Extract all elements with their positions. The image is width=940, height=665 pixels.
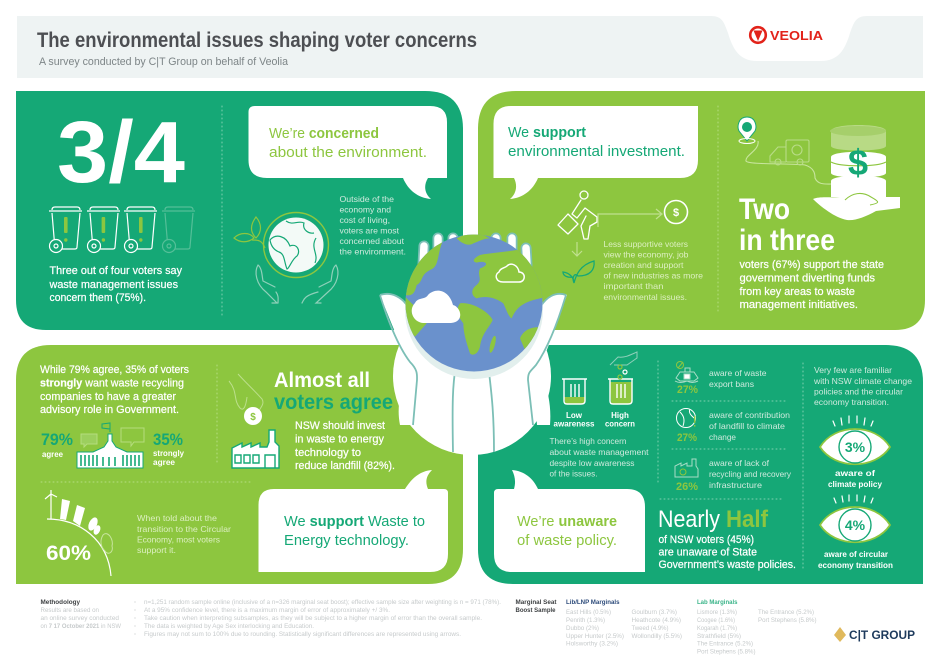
text: very few are familiar: economy transition. [814,397,889,407]
icon: city on curved planet with 60%: 60% [46,542,91,565]
text: outside of the economy [340,194,406,256]
panel: environmental investment [478,91,925,330]
speech bubble: we support environmental investment [494,106,698,199]
label: aware of circular economy transition [818,549,893,570]
text: of NSW voters: are unaware of State [658,546,757,558]
text: very few are familiar: policies and the circular [814,386,903,396]
heading: two in three: Two [739,193,790,226]
text: three out of four: Three out of four voters say [50,265,182,277]
footer: marginal seat boost sample [516,599,816,656]
footer: methodology: an online survey conducted [40,615,119,622]
footer: marginal seat boost sample: Goulburn (3.7%) [632,609,677,616]
subtitle: A survey conducted by C|T Group on behalf of Veolia [39,56,289,68]
text: less supportive voters: environmental issues. [604,292,687,302]
speech bubble: we support waste to energy: We support Waste to [284,513,425,530]
icon: eye 4% circular economy [820,495,890,542]
icon: sprout [563,261,594,283]
footer: survey notes: The data is weighted by Age Sex interlocking and Education. [144,623,314,630]
text: outside of the economy: cost of living, [340,215,390,225]
panel: concerned about the environment [16,91,463,330]
Veolia logo: VEOLIA [770,28,824,43]
Veolia logo [750,27,824,43]
footer: survey notes [134,599,501,638]
arrow: down to sprout [572,242,582,256]
labels: low awareness, high concern: High [611,411,629,420]
icon: hand dropping coin: $ [250,412,256,423]
heading: almost all voters agree [274,369,393,414]
footer: marginal seat boost sample: Lismore (1.3%) [697,609,737,616]
text: while 79% agree: While 79% agree, 35% of voters [40,364,189,376]
footer: marginal seat boost sample: Heathcote (4.9%) [632,617,681,624]
text: three out of four: waste management issues [49,279,178,291]
footer: marginal seat boost sample: Lib/LNP Marginals [566,599,620,606]
text: less supportive voters: creation and support [604,260,684,270]
label: aware of climate policy: aware of [835,468,875,478]
text: NSW should invest: NSW should invest [295,420,385,432]
text: outside of the economy: economy and [340,204,391,214]
stat: 35% strongly agree: strongly [153,449,185,458]
heading: almost all voters agree: Almost all [274,369,370,392]
icon: ship with waste export ban [675,362,698,382]
text: voters support: government diverting funds [740,272,876,284]
footer: marginal seat boost sample: Port Stephens (5.8%) [697,648,756,656]
text: export bans: aware of waste [709,368,767,378]
footer: marginal seat boost sample: Kogarah (1.7%) [697,625,737,632]
text: infrastructure: recycling and recovery [709,469,792,479]
footer: marginal seat boost sample: Holsworthy (3.2%) [566,640,618,648]
heading: nearly half: Nearly [658,506,720,533]
text: while 79% agree: companies to have a greater [40,391,176,403]
heading: nearly half: Half [726,506,769,533]
text: there's high concern: despite low awareness [550,458,634,468]
globe [406,234,542,372]
text: when told about circular economy: transition to the Circular [137,524,231,534]
footer: marginal seat boost sample: Dubbo (2%) [566,625,599,632]
text: of NSW voters: Government’s waste policies. [658,559,796,571]
icon: stack of coins [830,125,886,197]
icon: earth in hands with leaves [234,212,338,303]
icon: hand dropping coin [229,374,263,425]
text: infrastructure: aware of lack of [709,458,770,468]
text: when told about circular economy [137,513,231,555]
text: while 79% agree: strongly want waste recycling [40,378,184,390]
stat: 79% agree: agree [42,450,64,459]
speech bubble: we support waste to energy [258,470,448,572]
speech bubble: we support environmental investment: environmental investment. [508,143,685,160]
stat: 35% strongly agree [153,430,185,467]
speech bubble: we're unaware: of waste policy. [517,532,617,549]
footer: marginal seat boost sample: The Entrance (5.2%) [758,609,814,616]
text: less supportive voters [604,239,703,302]
text: outside of the economy: concerned about [340,236,405,246]
icon: globe with exclamation [676,408,696,428]
icon: dollar coin [664,200,688,224]
footer: marginal seat boost sample: Marginal Seat [516,599,557,606]
icon: waste truck [770,140,809,165]
text: landfill contribution: change [709,432,736,442]
footer: marginal seat boost sample: Strathfield (5%) [697,633,741,640]
icon: four waste bins [49,207,195,252]
icon: dollar coin: $ [673,207,679,219]
speech bubble: we're concerned: We’re concerned [269,125,379,142]
text: outside of the economy: the environment. [340,246,406,256]
speech bubble: we're unaware [494,470,645,572]
icon: white cloud [412,291,460,323]
text: when told about circular economy: support it. [137,545,176,555]
text: NSW should invest: in waste to energy [295,434,384,446]
stat: 27% export bans: 27% [677,384,698,396]
icon: high concern bin with hand [608,352,637,404]
text: very few are familiar [813,365,912,407]
text: infrastructure: infrastructure [709,480,762,490]
icon: eye 3% climate policy [820,416,890,464]
text: there's high concern: of the issues. [550,468,598,478]
footer: methodology [40,599,122,630]
icon: stack of coins: $ [848,142,868,183]
stat: 26% infrastructure: 26% [676,481,698,493]
speech bubble: we're concerned [248,106,447,199]
text: less supportive voters: Less supportive voters [604,239,688,249]
label: aware of climate policy [828,468,882,489]
text: NSW should invest [295,420,395,472]
central illustration: hands holding globe [380,230,567,455]
heading: two in three [739,193,835,257]
labels: low awareness, high concern [554,411,635,428]
speech bubble: we support waste to energy: Energy technology. [284,532,409,549]
stat: 79% agree [41,430,73,459]
panel: waste to energy [16,345,463,584]
text: infrastructure [709,458,792,490]
labels: low awareness, high concern: awareness [554,420,595,428]
stat: 79% agree: 79% [41,430,73,449]
panel: unaware of waste policy [478,345,923,584]
text: three out of four [49,265,182,304]
text: landfill contribution [709,410,790,442]
text: three out of four: concern them (75%). [50,292,146,304]
icon: location pin with recycling and route [738,117,832,184]
text: very few are familiar: Very few are familiar [814,365,892,375]
text: outside of the economy: voters are most [340,226,400,236]
footer: marginal seat boost sample: Upper Hunter (2.5%) [566,633,624,640]
footer: marginal seat boost sample: Penrith (1.3%) [566,617,605,624]
stat: 27% landfill: 27% [677,432,697,444]
icon: eye 4% circular economy: 4% [845,517,866,533]
footer: marginal seat boost sample: Lab Marginals [697,599,738,606]
footer: survey notes: Take caution when interpreting subsamples, as they will be subject to a higher margin of error than the overall sample. [144,615,482,622]
footer: methodology: Methodology [40,599,80,606]
icon: recycling factory [675,459,698,477]
labels: low awareness, high concern: Low [566,411,583,420]
icon: open hand under coins [813,191,900,220]
text: voters support [740,259,884,311]
text: voters support: from key areas to waste [740,286,855,298]
big stat 3/4: 3/4 [57,104,185,201]
footer: survey notes: At a 95% confidence level, there is a maximum margin of error of approximately +/ 3%. [144,607,390,614]
footer: marginal seat boost sample: Tweed (4.9%) [632,625,668,632]
footer: survey notes: Figures may not sum to 100% due to rounding. Statistically significant differences are represented using arrows. [144,631,461,638]
label: aware of climate policy: climate policy [828,479,882,489]
arrow: to dollar coin [598,209,662,227]
text: when told about circular economy: Economy, most voters [137,534,220,544]
speech bubble: we're unaware: We’re unaware [517,513,617,530]
speech bubble: we support environmental investment: We support [508,124,586,141]
footer: methodology: Results are based on [40,607,99,614]
footer: marginal seat boost sample: East Hills (0.5%) [566,609,611,616]
header band [17,16,923,78]
heading: nearly half [658,506,769,533]
text: while 79% agree [40,364,189,416]
footer: marginal seat boost sample: Coogee (1.6%) [697,617,735,624]
speech bubble: we're concerned: about the environment. [269,144,427,161]
text: landfill contribution: of landfill to climate [709,421,785,431]
text: voters support: management initiatives. [740,299,858,311]
icon: outlined cloud [496,264,524,282]
icon: person walking with briefcase [558,191,597,239]
footer: methodology: on 7 17 October 2021 in NSW [40,623,122,630]
text: very few are familiar: with NSW climate change [813,376,912,386]
text: NSW should invest: technology to [295,447,361,459]
footer: marginal seat boost sample: Boost Sample [516,607,556,614]
icon: eye 3% climate policy: 3% [845,439,866,455]
text: landfill contribution: aware of contribution [709,410,790,420]
heading: almost all voters agree: voters agree [274,391,393,414]
labels: low awareness, high concern: concern [605,420,635,428]
icon: factory [232,430,279,468]
text: when told about circular economy: When told about the [137,513,217,523]
footer: marginal seat boost sample: Port Stephens (5.8%) [758,617,816,624]
footer: marginal seat boost sample: The Entrance (5.2%) [697,640,753,648]
footer: marginal seat boost sample: Wollondilly (5.5%) [632,633,682,640]
label: aware of circular economy transition: economy transition [818,560,893,570]
text: NSW should invest: reduce landfill (82%). [295,460,395,472]
footer: survey notes: n=1,251 random sample online (inclusive of a n=326 marginal seat boost); effective sample size after weighting is n = 971 (78%). [144,599,501,606]
heading: two in three: in three [739,224,835,257]
label: aware of circular economy transition: aware of circular [824,549,889,559]
icon: parliament house with speech bubbles [77,423,144,468]
text: export bans [709,368,767,389]
text: export bans: export bans [709,379,754,389]
icon: city on curved planet with 60% [45,490,112,576]
icon: low awareness bin [562,379,587,404]
text: less supportive voters: of new industries as more [604,270,703,280]
text: there's high concern: about waste management [550,447,649,457]
title: The environmental issues shaping voter concerns [37,29,477,52]
text: there's high concern: There’s high concern [550,436,627,446]
text: voters support: voters (67%) support the state [740,259,884,271]
text: there's high concern [550,436,649,478]
C|T Group logo: C|T GROUP [849,628,915,642]
stat: 35% strongly agree: agree [153,458,176,467]
text: while 79% agree: advisory role in Government. [40,404,179,416]
stat: 35% strongly agree: 35% [153,430,183,449]
text: less supportive voters: view the economy, job [604,250,689,260]
text: less supportive voters: important than [604,281,664,291]
text: of NSW voters [658,534,796,571]
text: of NSW voters: of NSW voters (45%) [658,534,754,546]
text: outside of the economy: Outside of the [340,194,394,204]
